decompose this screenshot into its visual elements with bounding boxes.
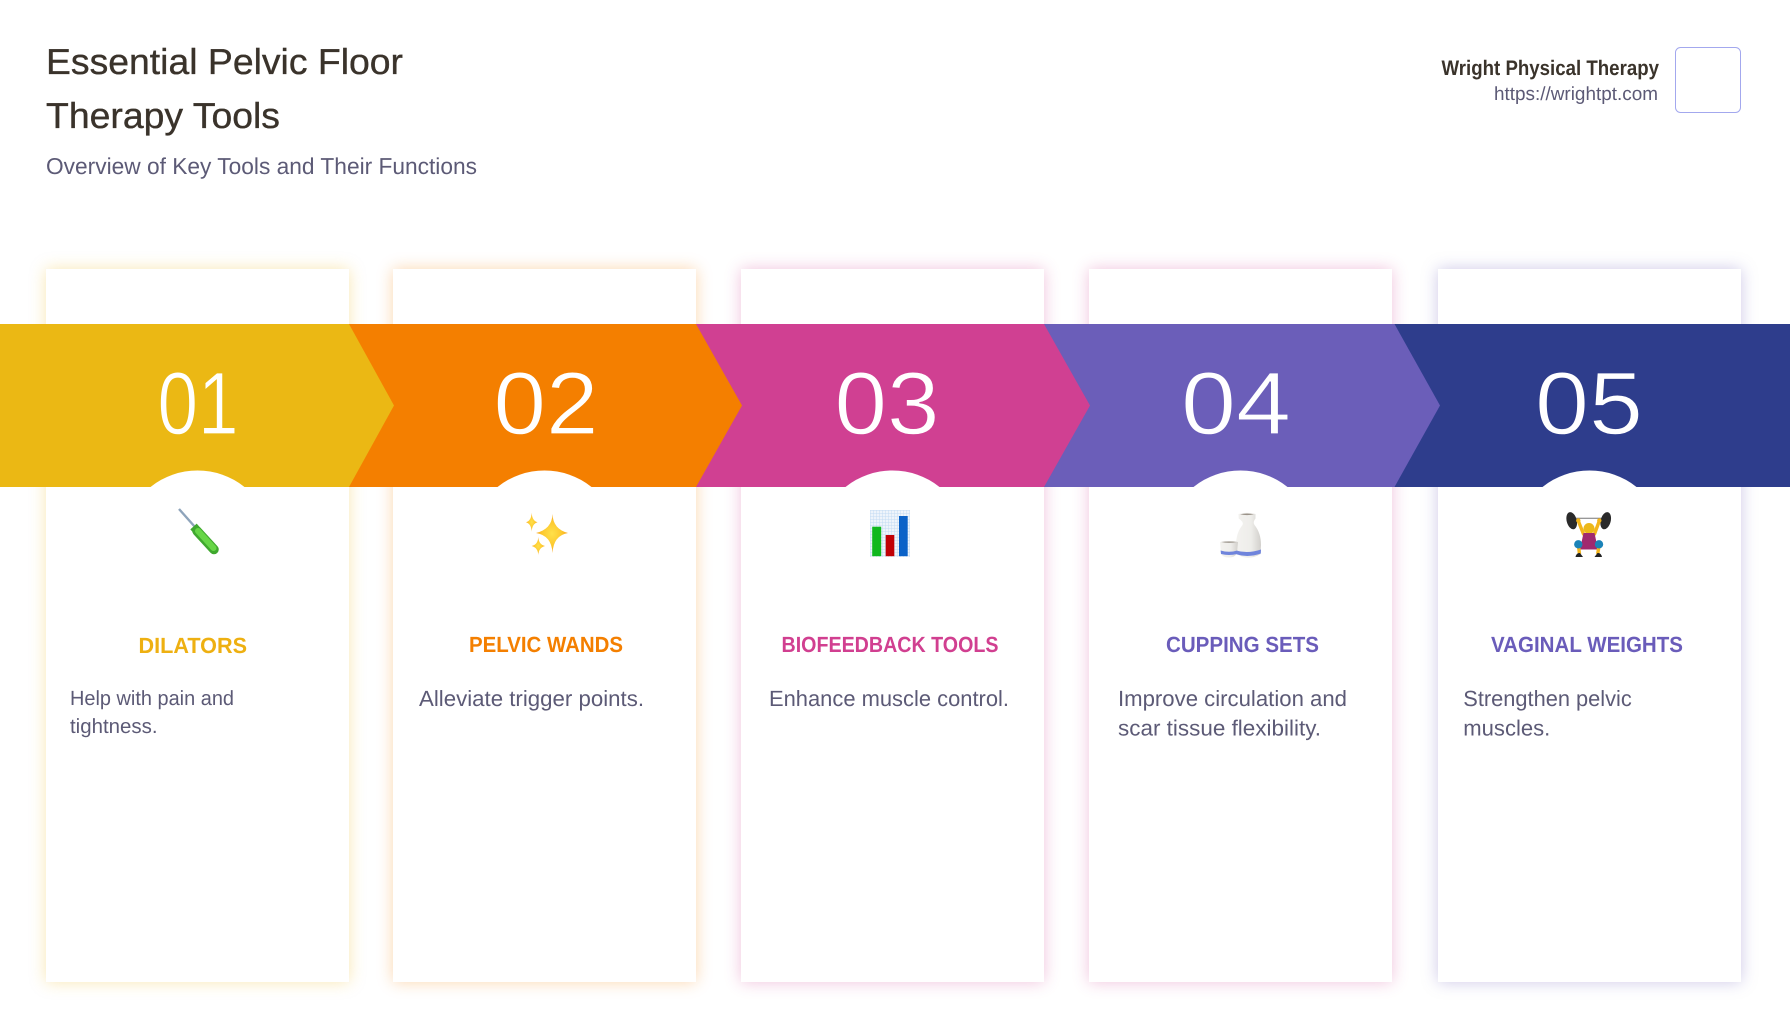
text: cupping sets description: Improve circulation and <box>1118 686 1347 711</box>
text: dilators description: tightness. <box>70 715 158 738</box>
arrow band: step 04: 04 <box>1181 353 1291 453</box>
header: title <box>46 41 403 136</box>
arrow band: step 05: 05 <box>1535 353 1643 453</box>
text: vaginal weights description: Strengthen pelvic <box>1463 686 1632 711</box>
brand: company name and url: Wright Physical Therapy <box>1442 57 1659 80</box>
panel: dilators card <box>46 269 349 982</box>
panel: cupping sets card <box>1089 269 1392 982</box>
brand: company name and url: https://wrightpt.com <box>1494 84 1658 105</box>
text: vaginal weights description: muscles. <box>1463 716 1550 741</box>
brand: logo placeholder <box>1676 48 1740 112</box>
text: cupping sets description <box>1118 686 1347 741</box>
arrow band: step 02: 02 <box>494 353 598 453</box>
header: title: Essential Pelvic Floor <box>46 41 403 82</box>
arrow band: step 02 <box>0 324 742 487</box>
text: pelvic wands description: Alleviate trigger points. <box>419 686 644 711</box>
icon: sparkles <box>526 513 568 555</box>
text: vaginal weights description <box>1463 686 1632 741</box>
text: dilators description: Help with pain and <box>70 687 234 710</box>
arrow band: step 03 <box>0 324 1090 487</box>
icon: screwdriver <box>179 509 214 550</box>
heading: biofeedback tools: BIOFEEDBACK TOOLS <box>782 632 998 657</box>
arrow band: step 05 <box>0 324 1790 487</box>
white tabs above icons <box>150 470 1636 487</box>
panel: biofeedback tools card <box>741 269 1044 982</box>
heading: pelvic wands: PELVIC WANDS <box>469 632 623 657</box>
arrow band: step 01: 01 <box>158 353 238 453</box>
text: dilators description <box>70 687 234 738</box>
arrow band: step 04 <box>0 324 1440 487</box>
brand: company name and url <box>1442 57 1659 105</box>
text: cupping sets description: scar tissue flexibility. <box>1118 716 1321 741</box>
text: biofeedback description: Enhance muscle control. <box>769 686 1009 711</box>
header: title: Therapy Tools <box>46 95 280 136</box>
icon: bar chart <box>870 510 910 557</box>
heading: cupping sets: CUPPING SETS <box>1166 632 1319 657</box>
panel: pelvic wands card <box>393 269 696 982</box>
heading: dilators: DILATORS <box>138 633 247 658</box>
arrow band: step 03: 03 <box>834 353 940 453</box>
heading: vaginal weights: VAGINAL WEIGHTS <box>1491 632 1683 657</box>
icon: weightlifter <box>1565 511 1613 557</box>
header: subtitle: Overview of Key Tools and Their Functions <box>46 153 477 179</box>
arrow band: step 01 <box>0 324 394 487</box>
panel: vaginal weights card <box>1438 269 1741 982</box>
icon: sake bottle and cup <box>1220 513 1261 558</box>
